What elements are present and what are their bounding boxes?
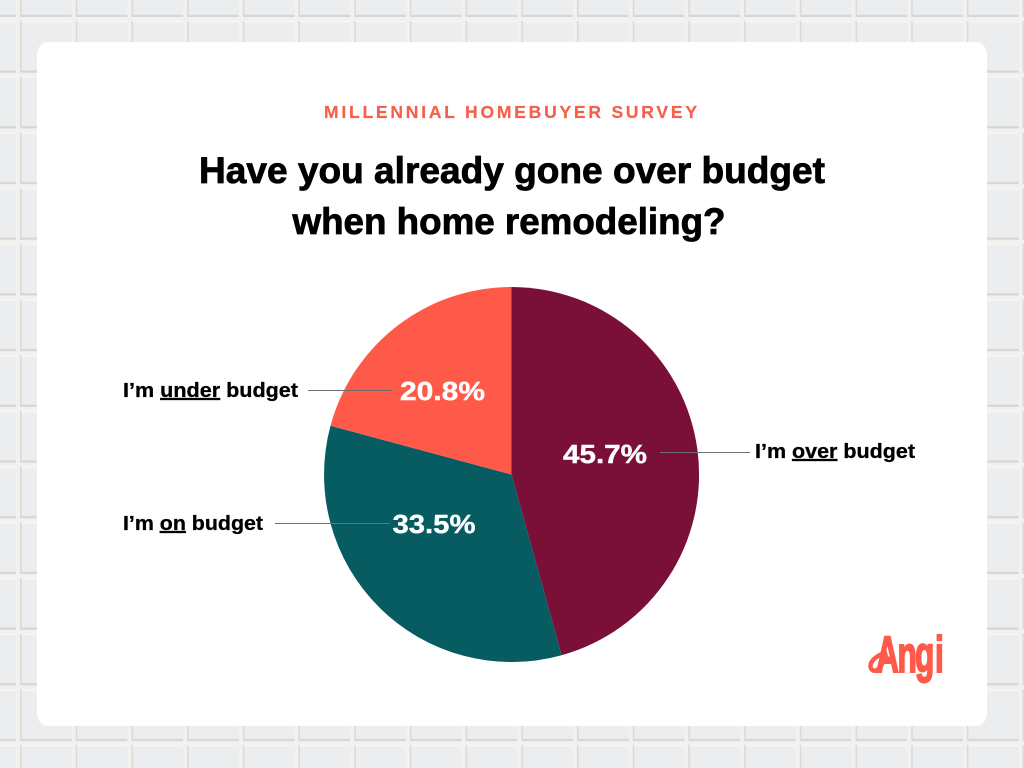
value: 33.5%: 33.5% (392, 509, 476, 539)
logo: Angi: Angi (876, 626, 944, 683)
slice: on budget 33.5% (324, 426, 562, 662)
label: on budget: I’m on budget (123, 513, 263, 535)
title (199, 150, 825, 242)
value: 45.7%: 45.7% (563, 439, 647, 469)
eyebrow heading: MILLENNIAL HOMEBUYER SURVEY (324, 102, 697, 122)
label: under budget: I’m under budget (123, 380, 298, 402)
slice: over budget 45.7% (512, 287, 699, 655)
value: 20.8%: 20.8% (400, 376, 485, 406)
title: when home remodeling? (292, 201, 726, 242)
slice: under budget 20.8% (330, 287, 512, 474)
title: Have you already gone over budget (199, 150, 825, 191)
pie chart (324, 287, 699, 662)
label: over budget: I’m over budget (755, 441, 915, 463)
